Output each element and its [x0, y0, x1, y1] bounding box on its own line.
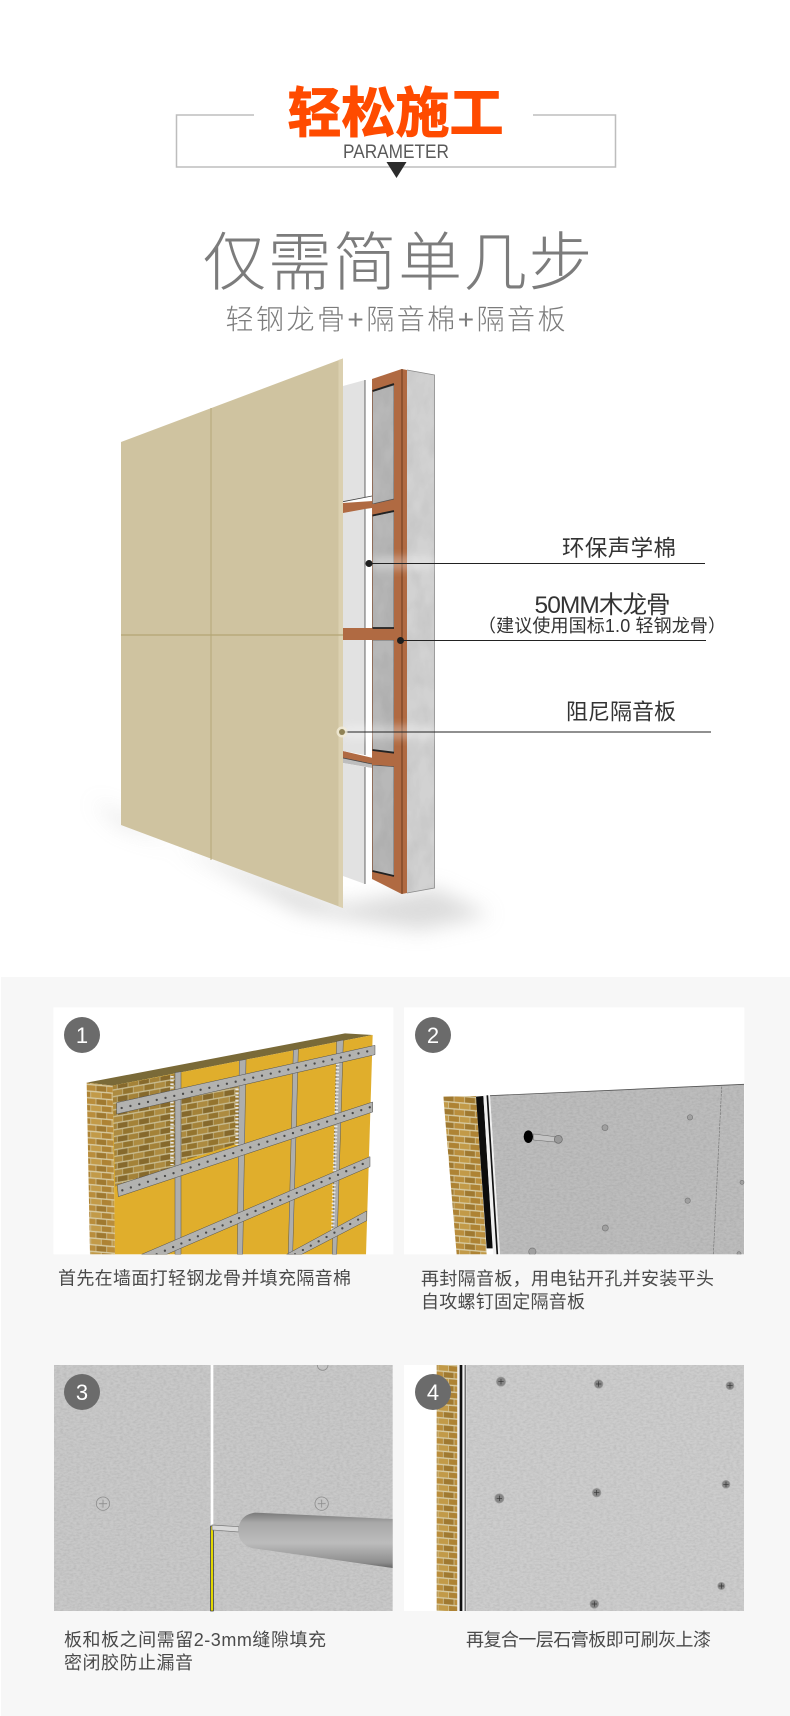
card 3 illustration: [54, 1365, 393, 1611]
cavity lines: [457, 1365, 467, 1611]
screw crosses: [497, 1379, 733, 1607]
sealant gun nozzle: [212, 1525, 239, 1532]
cavity black strip: [476, 1096, 493, 1248]
gypsum board: [490, 1084, 744, 1254]
screw outlines: [96, 1365, 328, 1510]
panel: step 4: [404, 1365, 744, 1650]
caption 2: 自攻螺钉固定隔音板: [421, 1292, 585, 1312]
badge 2: 2: [427, 1023, 439, 1048]
board gap: [211, 1365, 213, 1526]
icon: down triangle: [386, 162, 406, 178]
caption 1: 首先在墙面打轻钢龙骨并填充隔音棉: [58, 1268, 351, 1288]
caption 2: 再封隔音板，用电钻开孔并安装平头: [421, 1269, 714, 1289]
wall top edge: [87, 1033, 373, 1086]
grey back panels between keels: [372, 385, 394, 876]
callout: damping board: [336, 700, 711, 738]
perforated stud edges: [172, 1063, 338, 1230]
caption 3: 密闭胶防止漏音: [64, 1653, 193, 1673]
badge 2: [415, 1017, 451, 1053]
callout: acoustic wool: 环保声学棉: [562, 536, 676, 561]
sub heading: 轻钢龙骨+隔音棉+隔音板: [226, 304, 566, 335]
brick wall strip: [437, 1365, 457, 1611]
callout: wood keel: 50MM木龙骨: [534, 591, 670, 619]
badge 3: [64, 1374, 100, 1410]
gypsum surface: [466, 1365, 744, 1611]
panel: step 1: [58, 1017, 376, 1286]
title: 轻松施工: [288, 84, 504, 144]
callout: wood keel: [397, 591, 726, 644]
board edge: [483, 1095, 500, 1254]
main heading: 仅需简单几步: [202, 227, 592, 299]
brick wall edge: [443, 1096, 487, 1254]
panel: step 3: [54, 1365, 393, 1673]
title frame: [176, 115, 616, 167]
caption 3: 板和板之间需留2-3mm缝隙填充: [64, 1630, 326, 1650]
card 4 illustration: [404, 1365, 744, 1611]
badge 1: 1: [76, 1023, 88, 1048]
callout: damping board: 阻尼隔音板: [566, 700, 676, 724]
badge 4: [415, 1374, 451, 1410]
card 2 illustration: [443, 1084, 744, 1254]
brick side and face: [87, 1074, 238, 1254]
board seam: [713, 1087, 722, 1254]
vertical steel studs: [175, 1040, 343, 1254]
damping board front: [121, 358, 343, 908]
callout glow bands: [345, 556, 435, 739]
callout: wood keel: （建议使用国标1.0 轻钢龙骨）: [478, 616, 726, 636]
sealant gun body: [238, 1513, 393, 1568]
panel: step 2: [404, 1007, 744, 1312]
horizontal steel rails: [117, 1045, 375, 1254]
floor shadow: [92, 800, 490, 930]
subtitle: PARAMETER: PARAMETER: [343, 142, 449, 163]
badge 3: 3: [76, 1380, 88, 1405]
caption 2: [421, 1269, 714, 1312]
callout: acoustic wool: [366, 536, 705, 567]
keel dark shadow lines: [372, 384, 394, 876]
badge 1: [64, 1017, 100, 1053]
heading block: [176, 84, 616, 178]
rail holes: [122, 1050, 373, 1254]
insulation surface: [113, 1035, 373, 1254]
concrete base board: [407, 370, 434, 893]
wood keel frame: [343, 369, 407, 894]
panel: steps background: [1, 977, 790, 1716]
card 1 illustration: [86, 1033, 376, 1254]
screw being installed: [524, 1130, 562, 1143]
panel: wall section diagram: [92, 358, 726, 930]
caption 3: [64, 1630, 326, 1673]
caption 4: 再复合一层石膏板即可刷灰上漆: [466, 1629, 711, 1650]
screw heads: [529, 1115, 744, 1256]
acoustic wool blocks: [343, 379, 372, 884]
sealant line: [211, 1526, 213, 1611]
screw heads: [495, 1377, 734, 1608]
badge 4: 4: [427, 1380, 439, 1405]
